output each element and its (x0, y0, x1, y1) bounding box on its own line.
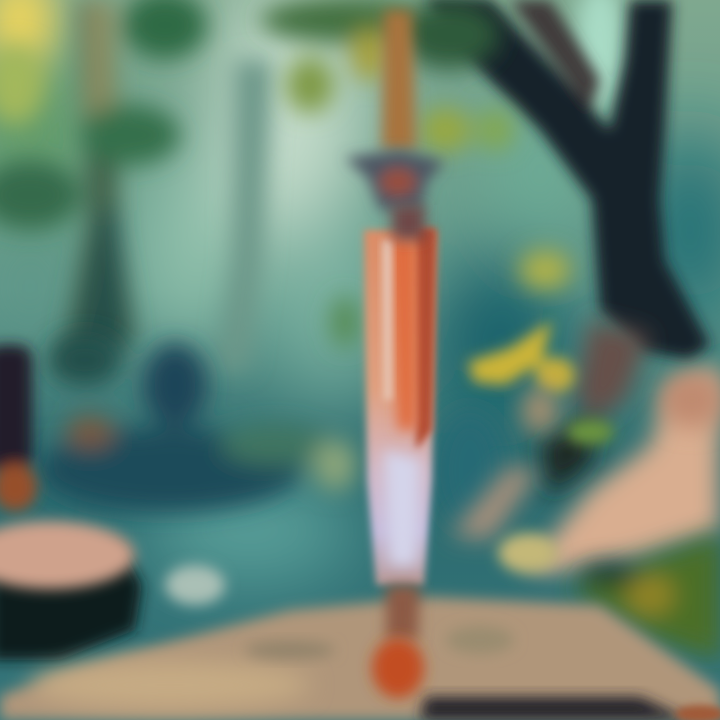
background trees (0, 0, 272, 370)
grass at lower right (570, 535, 720, 660)
sword blade (364, 205, 436, 585)
foliage leaves (260, 0, 575, 393)
sword crossguard (345, 150, 445, 210)
sword (345, 10, 445, 698)
tree stump (0, 521, 142, 660)
undergrowth and pond (40, 334, 506, 605)
left dark figure (0, 345, 37, 511)
large dark tree (425, 0, 710, 495)
sword tip (372, 585, 424, 698)
rocky ground (0, 597, 720, 720)
sword handle (382, 10, 416, 150)
creature body and limbs (450, 365, 720, 573)
